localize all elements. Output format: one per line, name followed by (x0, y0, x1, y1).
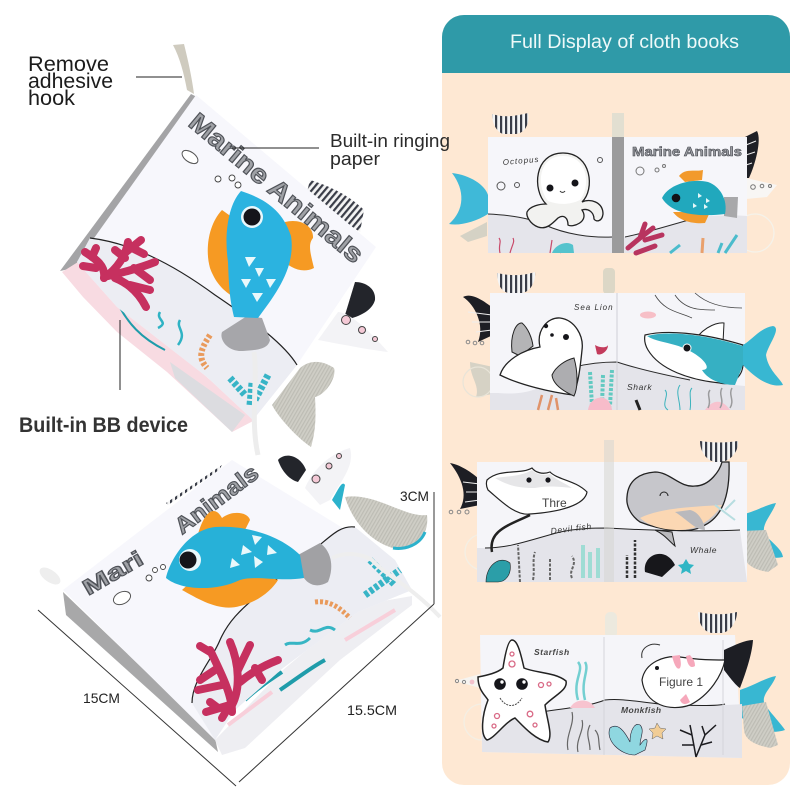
cover title: Marine Animals (183, 107, 370, 269)
coral (83, 240, 155, 307)
dimension: 15CM: 15CM (83, 690, 120, 706)
mini fish (679, 170, 703, 182)
callout: remove adhesive hook: Remove (28, 53, 109, 76)
striped tag (166, 465, 222, 505)
white striped fin (345, 282, 375, 320)
cover title pieces: Animals (169, 459, 263, 539)
small logo (111, 589, 133, 607)
plants (499, 238, 565, 253)
white fin with dots (305, 448, 351, 505)
product photo: book lying flat, bottom (37, 448, 440, 755)
grey seaweed (567, 712, 600, 752)
spine (63, 592, 218, 752)
product photo: open-angle book, top (60, 44, 388, 455)
stuffed fish (208, 210, 236, 296)
grey fin behind cover (272, 362, 334, 447)
callout: built-in ringing paper: Built-in ringing (330, 131, 450, 151)
octopus label: Octopus (502, 155, 540, 167)
overlaid label: Thre: Thre (542, 496, 567, 510)
dimension: 3CM: 3CM (400, 488, 429, 504)
book spread: starfish and monkfish (455, 612, 785, 758)
seafloor (77, 238, 297, 420)
aquatic plants (158, 312, 182, 345)
callout: built-in ringing paper (232, 131, 450, 169)
cover (63, 460, 412, 740)
ring (464, 704, 500, 740)
book spread: sea lion and shark (463, 268, 783, 410)
starfish (478, 640, 566, 742)
callout: remove adhesive hook: hook (28, 87, 76, 110)
octopus (527, 153, 603, 228)
seafloor (477, 528, 747, 582)
shark (645, 323, 743, 385)
spine strap (612, 113, 624, 138)
callout: remove adhesive hook (28, 53, 182, 110)
bubbles (215, 175, 241, 188)
ribbon (332, 554, 440, 617)
tag (497, 272, 535, 293)
whale (627, 462, 729, 546)
book spread: octopus and cover (449, 113, 777, 253)
pages (488, 137, 747, 253)
dimension: 3CM (400, 488, 434, 604)
teal coral (609, 724, 647, 755)
tail right (740, 503, 783, 558)
aquatic plants (285, 627, 335, 645)
dimension: 15CM (38, 610, 236, 786)
bubbles cover (636, 164, 666, 175)
sea lion (500, 318, 582, 396)
small logo (180, 148, 200, 166)
small pink fish (640, 312, 656, 318)
tag (492, 113, 528, 134)
panel heading: Full Display of cloth books (510, 32, 739, 53)
stuffed fish (198, 511, 250, 545)
spine strap (604, 440, 614, 582)
water lines (655, 293, 742, 318)
grey fin with ring (470, 362, 498, 397)
bubbles (146, 564, 166, 581)
black fin (450, 463, 480, 509)
shark label: Shark (627, 382, 652, 392)
ribbon (254, 352, 258, 455)
striped tag (306, 180, 364, 232)
black fin (278, 456, 306, 482)
monkfish (642, 644, 725, 708)
black coral (680, 725, 716, 757)
tag (698, 612, 737, 633)
overlaid label: Figure 1: Figure 1 (659, 675, 703, 689)
cover (77, 95, 376, 420)
book spread: devil fish and whale (449, 440, 783, 582)
black fin (745, 131, 759, 178)
water plant (576, 662, 586, 700)
hook tab (173, 44, 194, 94)
plants (590, 370, 612, 406)
seafloor (488, 214, 747, 253)
tail right (740, 676, 785, 732)
grey fin (345, 496, 427, 548)
callout: remove adhesive hook: adhesive (28, 70, 113, 93)
coral (198, 642, 278, 718)
hook (605, 612, 617, 638)
inner pages (215, 596, 412, 755)
callout: built-in ringing paper: paper (330, 149, 380, 169)
monkfish label: Monkfish (621, 705, 662, 715)
seafloor (192, 527, 412, 740)
ring (736, 214, 774, 252)
pages (480, 635, 742, 758)
dots (466, 340, 484, 345)
coral (628, 224, 662, 253)
tail (743, 326, 783, 386)
cover title pieces: Mari (78, 546, 148, 600)
tag (700, 441, 738, 462)
seafloor (482, 699, 742, 758)
cover title pieces (78, 459, 263, 600)
cover title: Marine Animals (632, 145, 742, 159)
small starfish (649, 723, 666, 739)
black fin (463, 296, 493, 342)
seafloor (490, 362, 745, 410)
plants and coral (486, 560, 510, 582)
pages (490, 293, 745, 410)
bubbles (497, 158, 602, 190)
panel: full display of cloth books (442, 15, 790, 785)
inner pages (62, 262, 255, 432)
ring (465, 534, 501, 570)
sea lion label: Sea Lion (574, 303, 614, 312)
dots (449, 510, 469, 514)
white ribbon end left (37, 564, 63, 588)
black fin (724, 640, 753, 688)
pages (477, 462, 747, 582)
devil fish (486, 468, 587, 552)
devil fish label: Devil fish (550, 521, 592, 536)
spine (60, 94, 197, 271)
hook (603, 268, 615, 294)
tail left (449, 173, 488, 225)
white fin (455, 674, 480, 688)
white fin (746, 178, 777, 199)
dimension: 15.5CM: 15.5CM (347, 702, 397, 718)
dimension: 15.5CM (239, 604, 434, 782)
whale label: Whale (690, 545, 717, 555)
starfish label: Starfish (534, 647, 570, 657)
callout: built-in BB device: Built-in BB device (19, 414, 188, 437)
panel header (442, 15, 790, 73)
red mark (595, 345, 608, 355)
